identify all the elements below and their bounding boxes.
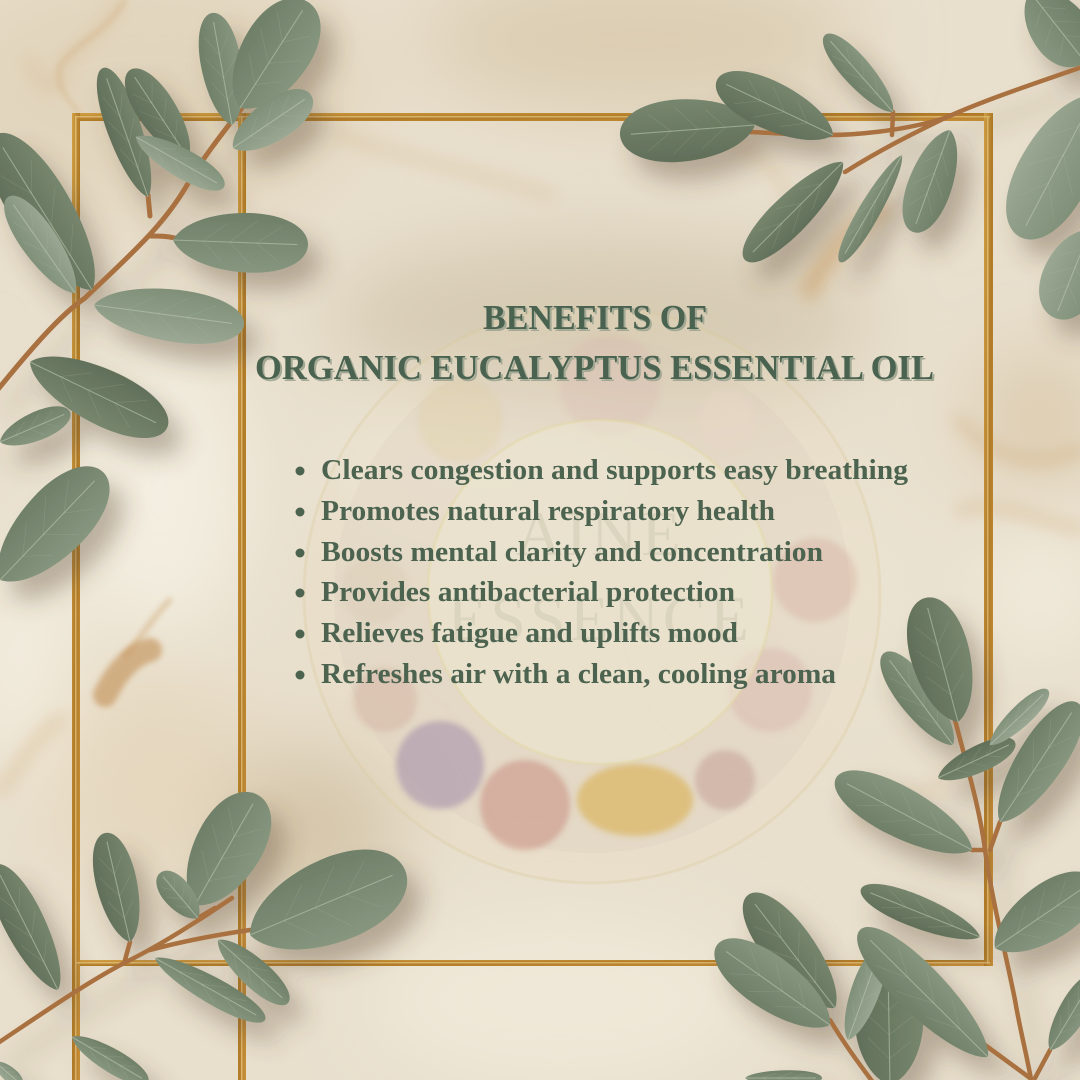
heading: ORGANIC EUCALYPTUS ESSENTIAL OIL xyxy=(255,348,934,387)
watermark wordmark: AINE xyxy=(516,498,684,569)
watermark flowers xyxy=(341,335,857,850)
heading: BENEFITS OF xyxy=(483,298,707,337)
watermark wordmark: ESSENCE xyxy=(447,583,753,654)
benefits list: Promotes natural respiratory health xyxy=(321,495,775,527)
watermark wordmark xyxy=(447,498,753,654)
benefits list: Clears congestion and supports easy breathing xyxy=(321,454,909,486)
benefits list xyxy=(296,454,909,690)
watermark: faded logo behind text xyxy=(304,307,880,883)
benefits list: Provides antibacterial protection xyxy=(321,576,735,608)
heading xyxy=(255,298,934,387)
eucalyptus branch: bottom left xyxy=(0,778,421,1080)
gold frame xyxy=(72,113,993,1080)
benefits list: Relieves fatigue and uplifts mood xyxy=(321,617,738,649)
eucalyptus branch: bottom right xyxy=(702,590,1080,1080)
benefits list: Boosts mental clarity and concentration xyxy=(321,536,823,568)
eucalyptus branch: top right xyxy=(618,0,1080,329)
benefits list: Refreshes air with a clean, cooling aroma xyxy=(321,658,836,690)
eucalyptus branch: top left xyxy=(0,0,337,603)
